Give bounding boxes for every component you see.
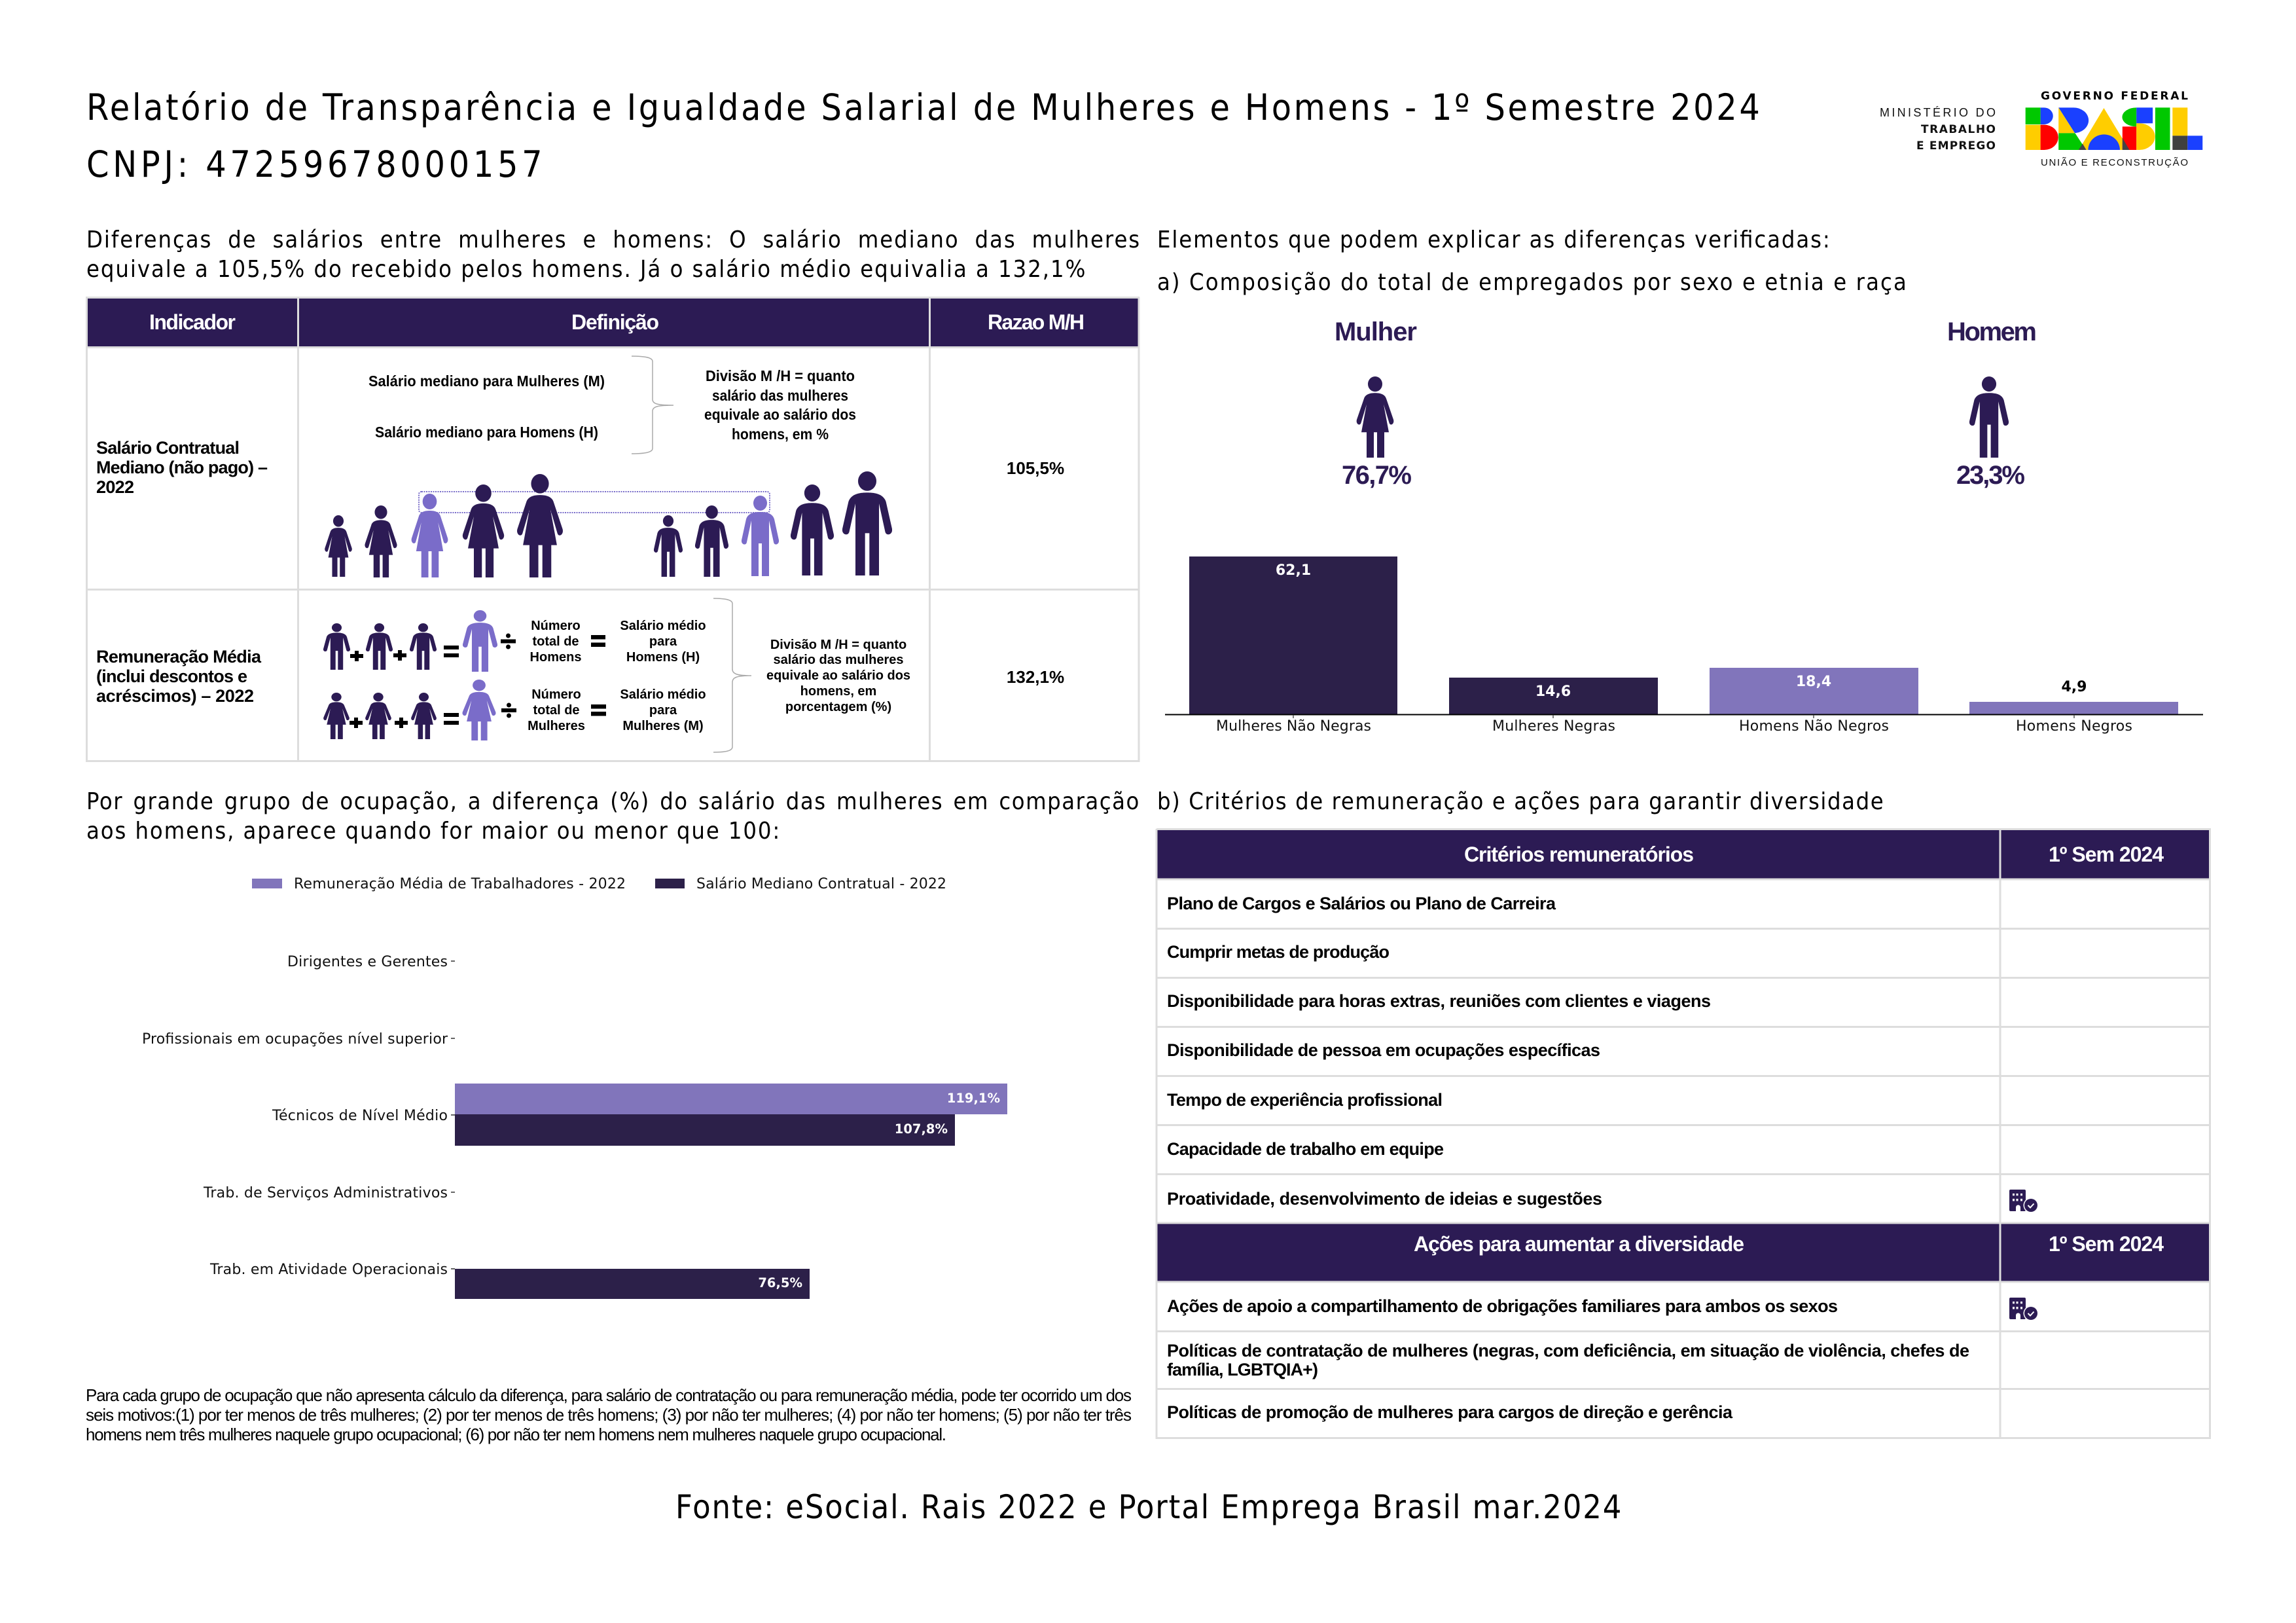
bar chart: diferença por grupo de ocupação: 76,5% [758,1275,802,1290]
action rows: Ações de apoio a compartilhamento de obrigações familiares para ambos os sexos [1167,1296,1838,1316]
row label: salário contratual: 2022 [96,477,134,497]
formula: mulheres: Mulheres [528,719,585,733]
bar chart: composição por etnia e raça: 62,1 [1276,562,1311,579]
definition: divisão M/H: homens, em % [732,426,829,443]
header: critérios remuneratórios: 1º Sem 2024 [2049,843,2164,866]
definition: divisão M/H porcentagem: salário das mulheres [774,653,903,667]
bar chart: composição por etnia e raça: 18,4 [1796,674,1831,690]
formula: homens: Homens (H) [626,650,700,665]
bar chart: composição por etnia e raça [1165,556,2203,735]
bar chart: diferença por grupo de ocupação: Técnicos de Nível Médio [272,1108,448,1124]
definition: divisão M/H porcentagem: homens, em [800,684,876,699]
panel: composição por sexo [1335,318,2037,490]
brace [713,598,751,752]
heading: critérios de remuneração: b) Critérios de remuneração e ações para garantir diversidade [1157,788,1884,815]
title: Relatório de Transparência e Igualdade Salarial de Mulheres e Homens - 1º Semestre 2024 [86,87,1760,129]
row label: salário contratual: Salário Contratual [96,438,240,458]
formula: homens: para [649,634,677,649]
formula: mulheres: total de [533,703,580,718]
value: mulher: 76,7% [1342,461,1412,490]
definition: salário mediano labels: Salário mediano para Homens (H) [375,424,598,441]
definition: divisão M/H: equivale ao salário dos [704,406,856,423]
CNPJ heading: CNPJ: 47259678000157 [86,144,543,186]
row label: remuneração média: (inclui descontos e [96,666,247,686]
heading: homem: Homem [1947,318,2037,346]
dotted median connector [419,492,770,513]
criteria rows: Disponibilidade para horas extras, reuniões com clientes e viagens [1167,991,1711,1011]
bar chart: diferença por grupo de ocupação: 119,1% [947,1091,1000,1106]
definition: salário mediano labels [368,373,605,441]
icon: building check [2009,1190,2038,1213]
action rows [1167,1296,1969,1422]
formula: mulheres: para [649,703,677,718]
logo: Governo Federal Brasil [2026,90,2202,168]
definition: divisão M/H porcentagem: equivale ao salário dos [766,668,910,683]
bar chart: composição por etnia e raça: 14,6 [1535,684,1571,700]
formula: homens: Salário médio [620,619,706,633]
bar chart: composição por etnia e raça: Homens Negros [2016,718,2132,735]
definition: salário mediano labels: Salário mediano para Mulheres (M) [368,373,605,390]
table header: Razao M/H [988,310,1085,334]
chart legend [252,876,946,892]
brace [632,356,673,454]
footnote [86,1385,1132,1444]
row label: remuneração média [96,647,262,706]
bar chart: composição por etnia e raça: Homens Não Negros [1739,718,1889,735]
bar chart: diferença por grupo de ocupação [142,954,1007,1299]
logo: Governo Federal Brasil: UNIÃO E RECONSTRUÇÃO [2041,157,2188,168]
logo: Ministério do Trabalho e Emprego: E EMPREGO [1916,139,1996,153]
source note: Fonte: eSocial. Rais 2022 e Portal Emprega Brasil mar.2024 [675,1489,1621,1527]
bar chart: composição por etnia e raça: 4,9 [2062,679,2087,695]
formula: homens: total de [532,634,579,649]
table header: Definição [571,310,659,334]
row label: remuneração média: Remuneração Média [96,647,262,666]
footnote: homens nem três mulheres naquele grupo ocupacional; (6) por não ter nem homens nem mulheres naquele grupo ocupacional. [86,1425,946,1444]
row label: salário contratual: Mediano (não pago) – [96,458,268,477]
table header: Indicador [149,310,236,334]
table header [87,299,1139,346]
formula: mulheres: Número [531,687,581,702]
action rows: Políticas de contratação de mulheres (negras, com deficiência, em situação de violência, chefes de [1167,1341,1969,1360]
criteria rows: Capacidade de trabalho em equipe [1167,1139,1444,1159]
value: razão mediana: 105,5% [1007,458,1064,478]
definition: divisão M/H [704,367,856,443]
chart legend: Salário Mediano Contratual - 2022 [696,876,946,892]
heading: mulher: Mulher [1335,318,1417,346]
definition: divisão M/H porcentagem: porcentagem (%) [785,700,891,714]
definition: divisão M/H porcentagem: Divisão M /H = quanto [770,638,906,652]
action rows: família, LGBTQIA+) [1167,1360,1318,1379]
table: critérios e ações [1157,829,2211,1439]
text block: por grande grupo de ocupação [86,788,1139,845]
bar chart: diferença por grupo de ocupação: Dirigentes e Gerentes [287,954,448,970]
icons: men by salary order [654,471,892,577]
text block: diferenças de salários [86,226,1139,283]
heading: elementos explicativos: Elementos que podem explicar as diferenças verificadas: [1157,226,1830,253]
bar chart: composição por etnia e raça: Mulheres Negras [1492,718,1615,735]
chart legend: Remuneração Média de Trabalhadores - 2022 [294,876,626,892]
action rows: Políticas de promoção de mulheres para cargos de direção e gerência [1167,1402,1733,1422]
table: indicadores [86,297,1139,762]
bar chart: diferença por grupo de ocupação: Profissionais em ocupações nível superior [142,1031,448,1048]
text block: por grande grupo de ocupação: Por grande grupo de ocupação, a diferença (%) do salário das mulheres em comparação [86,788,1139,815]
icon: man [1969,376,2009,458]
header: ações para diversidade: Ações para aumentar a diversidade [1414,1232,1744,1256]
text block: diferenças de salários: Diferenças de salários entre mulheres e homens: O salário mediano das mulheres [86,226,1139,253]
formula: mulheres [323,680,706,740]
logo: Ministério do Trabalho e Emprego: TRABALHO [1921,123,1996,136]
formula: homens: Número [531,619,581,633]
icon: building check [2009,1298,2038,1321]
value: homem: 23,3% [1956,461,2025,490]
bar chart: diferença por grupo de ocupação: Trab. em Atividade Operacionais [209,1262,448,1278]
bar chart: diferença por grupo de ocupação: 107,8% [895,1122,948,1137]
definition: divisão M/H porcentagem [766,638,910,714]
criteria rows [1167,894,1711,1209]
criteria rows: Plano de Cargos e Salários ou Plano de Carreira [1167,894,1556,913]
logo: Governo Federal Brasil: GOVERNO FEDERAL [2041,90,2188,103]
row label: remuneração média: acréscimos) – 2022 [96,686,254,706]
criteria rows: Disponibilidade de pessoa em ocupações específicas [1167,1040,1600,1060]
criteria rows: Proatividade, desenvolvimento de ideias e sugestões [1167,1189,1602,1209]
formula: homens: Homens [530,650,581,665]
logo: Ministério do Trabalho e Emprego [1880,106,1996,153]
text block: diferenças de salários: equivale a 105,5% do recebido pelos homens. Já o salário médio equivalia a 132,1% [86,255,1085,283]
bar chart: composição por etnia e raça: Mulheres Não Negras [1216,718,1371,735]
text block: por grande grupo de ocupação: aos homens, aparece quando for maior ou menor que 100: [86,817,780,845]
definition: divisão M/H: salário das mulheres [712,387,848,404]
definition: divisão M/H: Divisão M /H = quanto [706,367,855,384]
row label: salário contratual [96,438,268,497]
heading: composição: a) Composição do total de empregados por sexo e etnia e raça [1157,268,1907,296]
criteria rows: Tempo de experiência profissional [1167,1090,1443,1110]
header: critérios remuneratórios [1157,830,2210,879]
header: ações para diversidade [1157,1224,2210,1281]
formula: homens [323,610,706,672]
icons: women by salary order [325,474,563,577]
value: razão média: 132,1% [1007,667,1064,687]
header: critérios remuneratórios: Critérios remuneratórios [1464,843,1694,866]
footnote: Para cada grupo de ocupação que não apresenta cálculo da diferença, para salário de contratação ou para remuneração média, pode ter ocorrido um dos [86,1385,1132,1405]
logo: Ministério do Trabalho e Emprego: MINISTÉRIO DO [1880,106,1996,119]
footnote: seis motivos:(1) por ter menos de três mulheres; (2) por ter menos de três homens; (3) por não ter mulheres; (4) por não ter homens; (5) por não ter três [86,1405,1132,1425]
bar chart: diferença por grupo de ocupação: Trab. de Serviços Administrativos [203,1185,448,1201]
icon: woman [1357,376,1393,458]
formula: mulheres: Salário médio [620,687,706,702]
criteria rows: Cumprir metas de produção [1167,942,1390,962]
formula: mulheres: Mulheres (M) [622,719,704,733]
header: ações para diversidade: 1º Sem 2024 [2049,1232,2164,1256]
